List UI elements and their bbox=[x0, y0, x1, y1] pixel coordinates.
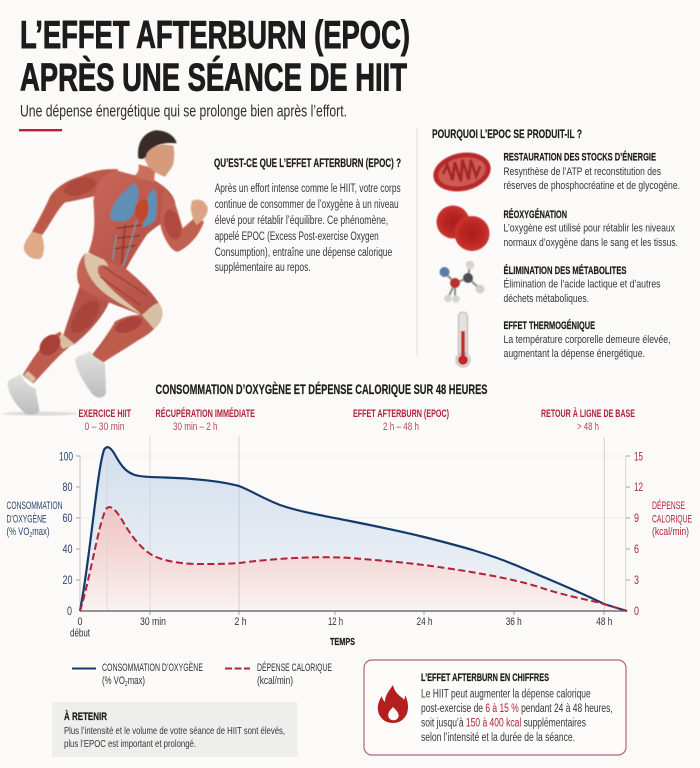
text block: definition: appelé EPOC (Excess Post-exercise Oxygen bbox=[215, 231, 379, 243]
torso bbox=[88, 170, 176, 269]
text block: definition: élevé pour rétablir l’équilibre. Ce phénomène, bbox=[215, 215, 388, 227]
left axis label: max) bbox=[32, 526, 50, 538]
time axis labels bbox=[70, 616, 612, 640]
left axis label bbox=[6, 500, 63, 539]
legend: calories bbox=[225, 661, 332, 687]
thermogenic item: EFFET THERMOGÉNIQUE bbox=[504, 319, 595, 332]
phase labels: 30 min – 2 h bbox=[173, 421, 218, 433]
thermogenic item: augmentant la dépense énergétique. bbox=[504, 348, 645, 360]
chart title: CONSOMMATION D’OXYGÈNE ET DÉPENSE CALORIQUE SUR 48 HEURES bbox=[156, 382, 488, 397]
left axis values: 20 bbox=[62, 573, 73, 587]
text block: definition bbox=[215, 183, 401, 274]
time axis labels: 48 h bbox=[596, 616, 612, 628]
phase labels: > 48 h bbox=[577, 421, 599, 433]
time axis labels: 2 h bbox=[234, 616, 246, 628]
legend: oxygen: max) bbox=[128, 675, 145, 687]
panel: why EPOC occurs bbox=[430, 127, 680, 367]
text block: figures bbox=[421, 689, 613, 744]
callout: key takeaway: Plus l’intensité et le volume de votre séance de HIIT sont élevés, bbox=[64, 725, 285, 737]
phase labels: RETOUR À LIGNE DE BASE bbox=[541, 407, 635, 420]
calorie curve bbox=[80, 507, 627, 611]
callout: key takeaway: plus l’EPOC est important et prolongé. bbox=[64, 738, 196, 750]
heading: why EPOC occurs: POURQUOI L’EPOC SE PRODUIT-IL ? bbox=[432, 127, 582, 141]
icon: thermometer bbox=[456, 312, 470, 367]
left axis values: 60 bbox=[62, 511, 73, 525]
right axis label bbox=[652, 499, 692, 538]
reoxygenation item bbox=[504, 208, 678, 249]
metabolites item bbox=[504, 264, 661, 305]
arteries bbox=[113, 220, 137, 267]
text block: definition: supplémentaire au repos. bbox=[215, 262, 311, 274]
panel: what is the afterburn effect bbox=[214, 158, 401, 274]
energy stores item bbox=[504, 151, 680, 192]
text block: figures: Le HIIT peut augmenter la dépense calorique bbox=[421, 689, 591, 701]
text block: figures: post-exercise de 6 à 15 % pendant 24 à 48 heures, bbox=[421, 703, 613, 715]
left axis values: 0 bbox=[67, 604, 72, 618]
title bbox=[20, 14, 410, 100]
left axis label: (% VO bbox=[6, 526, 39, 538]
metabolites item: Élimination de l’acide lactique et d’autres bbox=[504, 278, 661, 291]
thigh and hip bbox=[77, 253, 162, 329]
title: L’EFFET AFTERBURN (EPOC) bbox=[20, 14, 410, 57]
text block: definition: Après un effort intense comme le HIIT, votre corps bbox=[215, 183, 401, 195]
left axis values: 40 bbox=[62, 542, 73, 556]
right axis values: 15 bbox=[634, 450, 643, 464]
right axis label: (kcal/min) bbox=[652, 526, 689, 538]
left axis label: D’OXYGÈNE bbox=[6, 512, 46, 526]
right axis values: 0 bbox=[634, 604, 639, 618]
time axis title: TEMPS bbox=[330, 637, 355, 648]
title accent rule bbox=[19, 129, 62, 131]
rear leg bbox=[63, 285, 109, 345]
text block: definition: continue de consommer de l’oxygène à un niveau bbox=[215, 199, 399, 211]
phase labels: 0 – 30 min bbox=[84, 421, 124, 433]
text block: figures: selon l’intensité et la durée de la séance. bbox=[421, 732, 575, 744]
legend: oxygen: (% VO bbox=[102, 675, 134, 687]
right arm bbox=[160, 190, 204, 252]
title: APRÈS UNE SÉANCE DE HIIT bbox=[20, 56, 407, 100]
left axis values: 100 bbox=[59, 450, 73, 464]
right axis values: 6 bbox=[634, 542, 639, 556]
phase labels: EXERCICE HIIT bbox=[78, 408, 131, 420]
oxygen curve bbox=[80, 447, 627, 611]
time axis labels: 12 h bbox=[328, 616, 343, 628]
icon: molecule bbox=[440, 261, 484, 303]
subtitle: Une dépense énergétique qui se prolonge bien après l’effort. bbox=[20, 102, 347, 120]
left axis values bbox=[59, 450, 73, 618]
red area bbox=[80, 507, 627, 611]
shoes bbox=[7, 373, 39, 415]
phase labels: 2 h – 48 h bbox=[383, 421, 419, 433]
time axis labels: 30 min bbox=[140, 616, 166, 628]
icon: flame bbox=[378, 685, 408, 723]
line chart: oxygen consumption and calorie expenditure bbox=[76, 436, 630, 615]
left arm bbox=[31, 169, 118, 236]
right axis values bbox=[634, 450, 643, 618]
heading: figures: L’EFFET AFTERBURN EN CHIFFRES bbox=[421, 672, 549, 684]
left axis label: CONSOMMATION bbox=[6, 500, 63, 512]
legend: oxygen bbox=[72, 661, 203, 688]
right axis values: 9 bbox=[634, 511, 639, 525]
reoxygenation item: RÉOXYGÉNATION bbox=[504, 208, 567, 221]
text block: definition: Consumption), entraîne une dépense calorique bbox=[215, 247, 392, 259]
phase labels bbox=[78, 407, 635, 433]
callout: key takeaway bbox=[52, 702, 298, 757]
front calf bbox=[92, 315, 154, 362]
icon: mitochondrion bbox=[430, 147, 494, 197]
legend bbox=[72, 661, 332, 688]
callout: key takeaway: À RETENIR bbox=[64, 710, 107, 723]
heading: what is EPOC: QU’EST-CE QUE L’EFFET AFTERBURN (EPOC) ? bbox=[214, 158, 401, 170]
metabolites item: ÉLIMINATION DES MÉTABOLITES bbox=[504, 264, 626, 277]
right axis values: 12 bbox=[634, 480, 643, 494]
neck and face bbox=[133, 164, 157, 182]
right axis values: 3 bbox=[634, 573, 639, 587]
time axis labels: début bbox=[70, 628, 90, 640]
phase labels: EFFET AFTERBURN (EPOC) bbox=[353, 408, 449, 420]
time axis labels: 24 h bbox=[416, 616, 432, 628]
legend: calories: DÉPENSE CALORIQUE bbox=[257, 661, 332, 674]
blue area bbox=[80, 447, 627, 611]
heart bbox=[135, 200, 148, 224]
thermogenic item bbox=[504, 319, 670, 360]
lungs bbox=[110, 183, 138, 221]
left axis values: 80 bbox=[62, 480, 73, 494]
left axis label: 2 bbox=[29, 532, 32, 539]
illustration: running anatomical figure bbox=[3, 130, 208, 416]
metabolites item: déchets métaboliques. bbox=[504, 293, 589, 305]
phase labels: RÉCUPÉRATION IMMÉDIATE bbox=[156, 407, 255, 420]
legend: calories: (kcal/min) bbox=[257, 675, 293, 687]
time axis labels: 36 h bbox=[506, 616, 522, 628]
text block: figures: soit jusqu’à 150 à 400 kcal supplémentaires bbox=[421, 718, 586, 730]
legend: oxygen: CONSOMMATION D’OXYGÈNE bbox=[102, 661, 203, 674]
panel: key figures bbox=[364, 660, 626, 755]
legend: oxygen: 2 bbox=[125, 681, 128, 688]
icon: red blood cells bbox=[436, 206, 490, 251]
time axis labels: 0 bbox=[78, 616, 82, 628]
